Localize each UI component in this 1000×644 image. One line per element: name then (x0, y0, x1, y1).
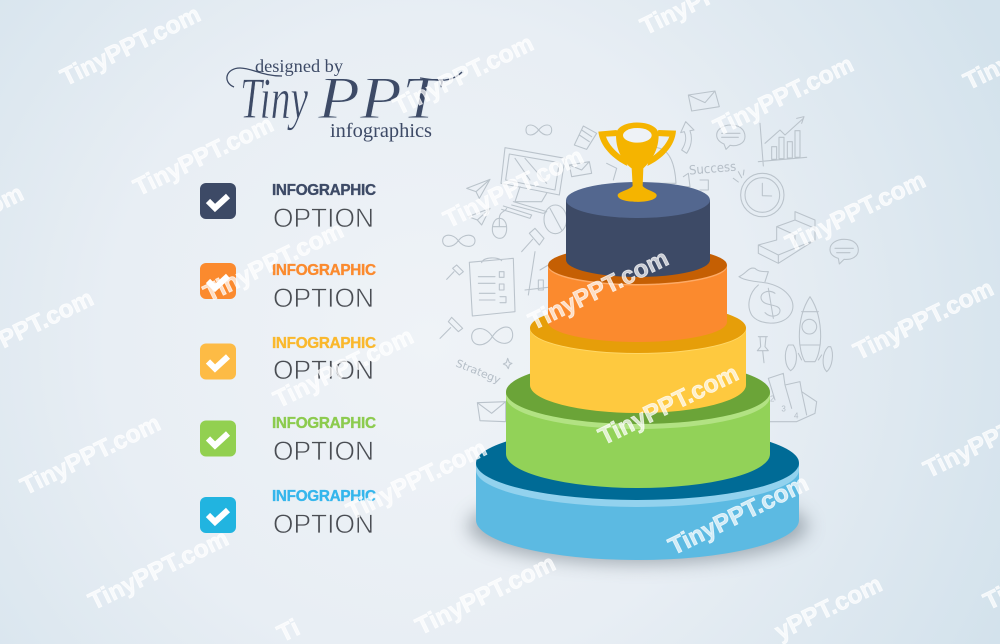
option 4: green: OPTION (273, 436, 374, 466)
watermarks: TinyPPT.com (709, 51, 858, 142)
logo: designed by TinyPPT infographics: PPT (317, 65, 444, 131)
icon: infinity top (526, 125, 552, 135)
icon: pin lower left (440, 317, 463, 338)
watermarks: TinyPPT.com (524, 245, 673, 336)
icon: growth chart (758, 117, 807, 166)
watermarks: TinyPPT.com (269, 323, 418, 414)
icon: pin small (447, 265, 463, 279)
watermarks: TinyPPT.com (129, 111, 278, 202)
icon: infinity left (443, 235, 475, 246)
icon: monitor (501, 148, 565, 218)
watermarks: TinyPPT.com (199, 217, 348, 308)
tier 1: navy (566, 182, 710, 277)
watermarks: yPPT.com (771, 571, 887, 644)
doodle icons behind the pyramid (440, 91, 858, 422)
icon: envelope lower (477, 402, 506, 422)
icon: paper planes (467, 179, 490, 225)
option 3: yellow: OPTION (273, 355, 374, 385)
watermarks: TinyPPT.com (594, 360, 743, 451)
logo: designed by TinyPPT infographics (227, 56, 462, 142)
option 3: yellow: INFOGRAPHIC (272, 335, 376, 352)
option 2: orange: OPTION (273, 283, 374, 313)
logo: designed by TinyPPT infographics: infographics (330, 121, 432, 142)
watermarks: TinyPPT.com (781, 167, 930, 258)
watermarks: TinyPPT.com (439, 143, 588, 234)
icon: pin right (757, 337, 768, 363)
icon: clipboard (469, 258, 515, 316)
option 1: navy: OPTION (273, 203, 374, 233)
icon: money bag (739, 268, 793, 323)
tier 4: green (506, 360, 770, 488)
watermarks: TinyPPT.com (664, 470, 813, 561)
icon: stairs lower (768, 373, 817, 422)
stair number 4: 4 (794, 411, 799, 420)
icon: rocket fins (785, 345, 832, 372)
icon: star (503, 358, 512, 369)
tier 2: orange (548, 246, 727, 342)
icon: trophy (598, 122, 676, 202)
icon: clock (733, 170, 784, 217)
icon: mouse (492, 208, 507, 238)
stair number 2: 2 (770, 395, 775, 404)
option 4: green: INFOGRAPHIC (272, 415, 376, 432)
icon: envelope middle (569, 162, 592, 177)
tier 3: yellow (530, 303, 746, 413)
option 2: orange (200, 262, 376, 313)
watermarks: TinyPPT.com (342, 435, 491, 526)
icon: podium stairs (758, 212, 815, 263)
logo: designed by TinyPPT infographics: Tiny (240, 66, 308, 131)
tier 5: blue (476, 426, 799, 560)
watermarks: TinyPPT.com (389, 30, 538, 121)
option 5: blue: OPTION (273, 509, 374, 539)
icon: small bubble (830, 239, 858, 264)
logo: designed by TinyPPT infographics: designed by (255, 56, 343, 76)
option 4: green (200, 415, 376, 466)
icon: infinity middle (472, 327, 513, 345)
icon: note (574, 126, 597, 149)
option 1: navy (200, 182, 376, 233)
base shadow (468, 488, 808, 564)
stair number 3: 3 (781, 405, 786, 414)
icon: pin mid (522, 228, 544, 252)
icon: rocket behind trophy (607, 147, 708, 190)
stacked cylinder pyramid (468, 122, 808, 564)
option 3: yellow (200, 335, 376, 385)
option 2: orange: INFOGRAPHIC (272, 262, 376, 279)
option 5: blue: INFOGRAPHIC (272, 488, 376, 505)
icon: rocket (799, 297, 821, 362)
watermarks: TinyPPT.com (16, 410, 165, 501)
watermarks: TinyPPT.com (411, 550, 560, 641)
option list (200, 182, 376, 539)
icon: no sign (544, 205, 567, 234)
option 1: navy: INFOGRAPHIC (272, 182, 376, 199)
icon: curved arrow (681, 122, 694, 153)
watermarks: TinyPPT.com (84, 525, 233, 616)
icon: envelope top (688, 91, 719, 111)
watermarks: TinyPPT.com (849, 275, 998, 366)
icon: speech bubble (717, 125, 745, 149)
icon: dollar sign (761, 288, 780, 318)
icon: partial bar chart (525, 252, 548, 295)
option 5: blue (200, 488, 376, 539)
label: Strategy: Strategy (454, 357, 503, 387)
label: Success: Success (688, 159, 737, 178)
watermarks: TinyPPT.com (56, 1, 205, 92)
